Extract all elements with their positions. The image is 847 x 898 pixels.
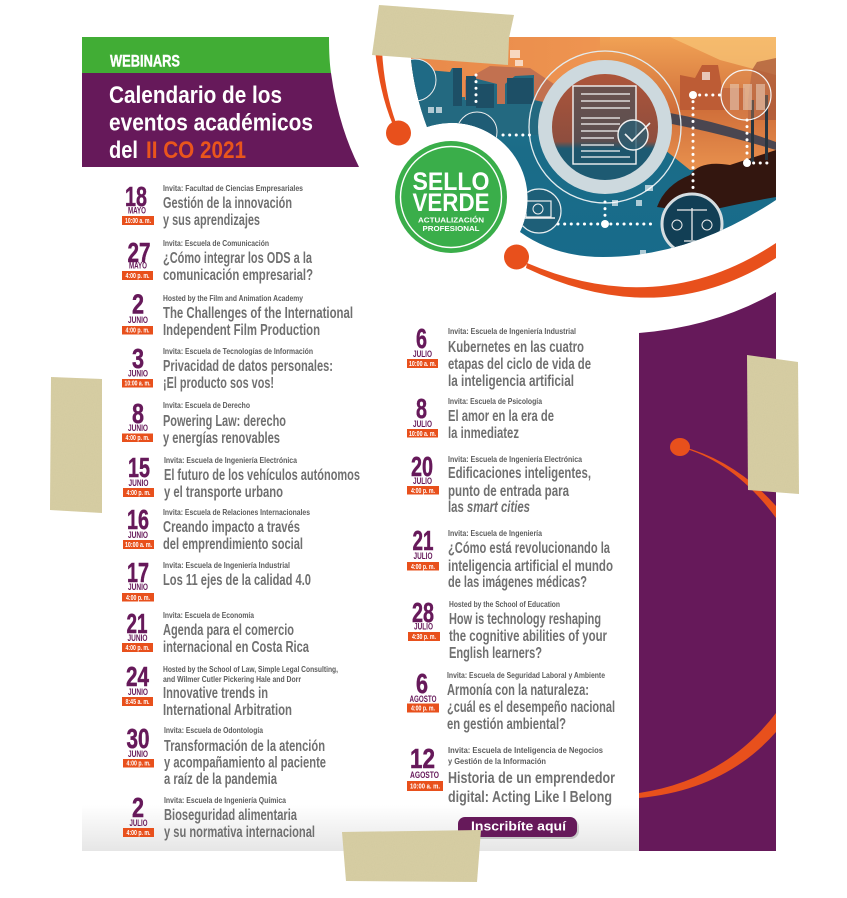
event: 8 junio: y energías renovables	[163, 430, 280, 447]
icon: partial circle top left	[411, 58, 436, 102]
event: 27 mayo: 4:00 p. m.	[126, 273, 150, 280]
event: 18 mayo: 10:00 a. m.	[125, 218, 151, 225]
event: 8 junio: Invita: Escuela de Derecho	[163, 401, 250, 410]
event: 12 agosto: y Gestión de la Información	[448, 757, 546, 766]
dotted connector lines	[476, 75, 772, 224]
event: 15 junio: Invita: Escuela de Ingeniería Electrónica	[164, 456, 298, 465]
event: 16 junio: del emprendimiento social	[163, 536, 303, 553]
icon: document with check ring	[529, 51, 681, 203]
event: 2 junio: JUNIO	[128, 315, 148, 325]
event: 8 junio: 4:00 p. m.	[126, 435, 150, 442]
event: 21 julio: inteligencia artificial el mundo	[448, 558, 613, 575]
event: 27 mayo: ¿Cómo integrar los ODS a la	[163, 250, 312, 267]
event: 6 agosto: 4:00 p. m.	[411, 706, 435, 712]
event: 30 junio: 4:00 p. m.	[126, 760, 151, 768]
header: main title	[82, 73, 359, 167]
event: 20 julio: Invita: Escuela de Ingeniería Electrónica	[448, 455, 583, 464]
event: 15 junio: JUNIO	[128, 478, 148, 488]
event: 28 julio: English learners?	[449, 645, 542, 662]
tape: left	[50, 377, 102, 513]
event: 30 junio: Transformación de la atención	[164, 738, 325, 755]
event: 6 agosto: 6	[416, 668, 428, 699]
event: 2 junio: The Challenges of the International	[163, 305, 353, 322]
event: 18 mayo: MAYO	[128, 206, 146, 216]
event: 27 mayo: comunicación empresarial?	[163, 267, 313, 284]
header: main title: eventos académicos	[109, 110, 313, 136]
icon: laptop circle	[517, 189, 561, 233]
event: 30 junio	[123, 723, 326, 788]
event: 30 junio: 30	[126, 723, 150, 754]
event: 27 mayo: Invita: Escuela de Comunicación	[163, 239, 269, 248]
event: 15 junio: 15	[128, 452, 150, 483]
event: 2 julio: JULIO	[130, 818, 148, 828]
event: 18 mayo: 18	[125, 181, 147, 212]
event: 3 junio: 10:00 a. m.	[124, 380, 151, 388]
icon: binders circle	[721, 70, 771, 120]
event: 3 junio	[122, 343, 333, 392]
badge: Sello Verde: SELLO	[412, 168, 490, 196]
event: 17 junio: 4:00 p. m.	[126, 595, 150, 602]
event: 24 junio: JUNIO	[128, 687, 148, 697]
event: 21 junio: 4:00 p. m.	[126, 645, 150, 652]
event: 30 junio: Invita: Escuela de Odontología	[164, 726, 264, 735]
event: 6 agosto: ¿cuál es el desempeño nacional	[447, 699, 615, 716]
event: 2 julio: Invita: Escuela de Ingeniería Química	[164, 796, 287, 805]
event: 8 julio: 10:00 a. m.	[409, 431, 436, 438]
event: 16 junio: 10:00 a. m.	[125, 542, 152, 549]
event: 3 junio: Privacidad de datos personales:	[163, 358, 333, 375]
event: 21 julio: de las imágenes médicas?	[448, 574, 587, 591]
event: 6 agosto	[407, 668, 615, 733]
event: 21 julio: 21	[412, 525, 434, 556]
event: 6 julio: JULIO	[413, 349, 432, 359]
event: 21 julio: 4:00 p. m.	[411, 564, 435, 571]
event: 20 julio	[407, 451, 591, 516]
event: 6 julio: etapas del ciclo de vida de	[448, 356, 591, 373]
event: 24 junio	[122, 661, 338, 719]
tape: top	[372, 5, 514, 65]
event: 24 junio: Hosted by the School of Law, Simple Legal Consulting,	[163, 665, 338, 674]
event: 16 junio: Invita: Escuela de Relaciones Internacionales	[163, 508, 311, 517]
event: 15 junio: 4:00 p. m.	[126, 490, 151, 497]
event: 28 julio: 4:30 p. m.	[412, 634, 436, 641]
icon: scales circle	[662, 194, 722, 254]
event: 6 julio	[407, 323, 591, 390]
event: 17 junio: Los 11 ejes de la calidad 4.0	[163, 572, 311, 589]
event: 16 junio: JUNIO	[128, 530, 148, 540]
event: 28 julio: JULIO	[414, 622, 433, 632]
event: 12 agosto	[407, 743, 615, 806]
event: 2 junio: Independent Film Production	[163, 322, 320, 339]
event: 3 junio: Invita: Escuela de Tecnologías de Información	[163, 347, 313, 356]
event: 15 junio: y el transporte urbano	[164, 484, 283, 501]
event: 6 agosto: Invita: Escuela de Seguridad Laboral y Ambiente	[447, 671, 606, 680]
event: 2 junio: Hosted by the Film and Animation Academy	[163, 294, 304, 303]
event: 2 julio: 2	[132, 792, 144, 823]
image: city and data illustration	[394, 37, 780, 262]
event: 24 junio: 8:45 a. m.	[126, 699, 150, 706]
event: 6 julio: Kubernetes en las cuatro	[448, 339, 584, 356]
event: 20 julio: JULIO	[413, 476, 432, 486]
event: 24 junio: 24	[126, 661, 149, 692]
event: 28 julio: How is technology reshaping	[449, 611, 601, 628]
event: 12 agosto: 10:00 a. m.	[410, 784, 440, 790]
event: 12 agosto: Historia de un emprendedor	[448, 770, 615, 787]
decorative arc: bottom orange curve with dot	[504, 243, 776, 298]
button: Inscribíte aquí: Inscribíte aquí	[471, 820, 567, 834]
event: 24 junio: and Wilmer Cutler Pickering Hale and Dorr	[163, 675, 301, 684]
event: 2 julio: 4:00 p. m.	[126, 830, 151, 837]
event: 17 junio: 17	[127, 557, 149, 588]
decorative arc: top left orange line with dot	[375, 50, 411, 146]
event: 24 junio: Innovative trends in	[163, 685, 268, 702]
event: 2 julio: y su normativa internacional	[164, 824, 315, 841]
event: 8 julio: Invita: Escuela de Psicología	[448, 397, 543, 406]
event: 16 junio: Creando impacto a través	[163, 519, 300, 536]
event: 17 junio	[122, 557, 311, 602]
header: green webinars strip	[82, 37, 331, 73]
event: 15 junio: El futuro de los vehículos autónomos	[164, 467, 360, 484]
badge: Sello Verde: VERDE	[412, 189, 490, 217]
badge: Sello Verde: ACTUALIZACIÓN	[418, 216, 484, 224]
event: 28 julio: 28	[412, 597, 434, 628]
panel: purple side band	[639, 292, 776, 851]
header: main title: Calendario de los	[109, 82, 282, 109]
decorative arc: upper orange line with dot	[670, 438, 776, 518]
event: 27 mayo: MAYO	[129, 260, 147, 270]
event: 12 agosto: digital: Acting Like I Belong	[448, 789, 612, 806]
event: 8 junio: Powering Law: derecho	[163, 413, 286, 430]
header: main title: II CO 2021	[146, 137, 246, 164]
event: 12 agosto: Invita: Escuela de Inteligencia de Negocios	[448, 746, 604, 755]
icon: partial circle laptop left	[458, 112, 498, 138]
event: 21 julio: JULIO	[414, 551, 432, 561]
event: 17 junio: Invita: Escuela de Ingeniería Industrial	[163, 561, 290, 570]
event: 6 agosto: en gestión ambiental?	[447, 716, 566, 733]
event: 6 julio: la inteligencia artificial	[448, 373, 574, 390]
event: 20 julio: las smart cities	[448, 499, 530, 516]
event: 2 julio: Bioseguridad alimentaria	[164, 807, 297, 824]
event: 30 junio: a raíz de la pandemia	[164, 771, 277, 788]
event: 3 junio: 3	[132, 343, 144, 374]
tape: bottom	[342, 830, 481, 882]
event: 16 junio: 16	[127, 504, 149, 535]
event: 20 julio: 4:00 p. m.	[411, 488, 435, 495]
event: 6 julio: 6	[416, 323, 427, 354]
header: main title: del	[109, 137, 138, 164]
header: green webinars strip: WEBINARS	[110, 52, 180, 70]
button: Inscribíte aquí	[458, 817, 579, 839]
event: 6 julio: 10:00 a. m.	[409, 361, 436, 368]
event: 20 julio: Edificaciones inteligentes,	[448, 465, 591, 482]
event: 8 julio: la inmediatez	[448, 425, 519, 442]
event: 8 junio: JUNIO	[128, 423, 148, 433]
event: 20 julio: 20	[411, 451, 433, 482]
event: 21 julio: Invita: Escuela de Ingeniería	[448, 529, 543, 538]
event: 8 julio: 8	[416, 393, 427, 424]
event: 21 junio: Invita: Escuela de Economía	[163, 611, 255, 620]
event: 21 junio: internacional en Costa Rica	[163, 639, 309, 656]
badge: Sello Verde: PROFESIONAL	[422, 224, 480, 233]
event: 18 mayo: Gestión de la innovación	[163, 195, 292, 212]
event: 18 mayo: y sus aprendizajes	[163, 212, 260, 229]
event: 6 agosto: Armonía con la naturaleza:	[447, 682, 589, 699]
event: 2 julio	[123, 792, 315, 841]
event: 20 julio: punto de entrada para	[448, 483, 569, 500]
event: 8 junio: 8	[132, 398, 144, 429]
tape: right	[747, 355, 799, 494]
event: 27 mayo: 27	[128, 237, 150, 268]
event: 8 julio: El amor en la era de	[448, 408, 554, 425]
event: 21 junio: Agenda para el comercio	[163, 622, 294, 639]
event: 3 junio: JUNIO	[128, 368, 148, 378]
event: 21 junio: 21	[126, 608, 148, 639]
event: 3 junio: ¡El producto sos vos!	[163, 375, 274, 392]
event: 2 junio	[122, 288, 353, 339]
event: 18 mayo: Invita: Facultad de Ciencias Empresariales	[163, 184, 304, 193]
event: 18 mayo	[122, 181, 304, 229]
event: 16 junio	[123, 504, 311, 553]
event: 24 junio: International Arbitration	[163, 702, 292, 719]
event: 30 junio: JUNIO	[128, 749, 148, 759]
decorative arc: lower orange band	[639, 713, 776, 798]
event: 6 julio: Invita: Escuela de Ingeniería Industrial	[448, 327, 576, 336]
event: 2 junio: 2	[132, 288, 144, 320]
event: 28 julio: Hosted by the School of Education	[449, 600, 560, 609]
event: 12 agosto: 12	[410, 743, 435, 774]
event: 21 julio	[407, 525, 613, 591]
event: 15 junio	[123, 452, 360, 501]
event: 8 julio	[407, 393, 554, 442]
event: 21 julio: ¿Cómo está revolucionando la	[448, 540, 610, 557]
event: 27 mayo	[122, 237, 313, 284]
event: 17 junio: JUNIO	[128, 582, 148, 592]
event: 21 junio	[122, 608, 309, 656]
badge: Sello Verde	[395, 141, 507, 253]
event: 21 junio: JUNIO	[128, 633, 148, 643]
event: 12 agosto: AGOSTO	[410, 770, 439, 780]
event: 6 agosto: AGOSTO	[410, 694, 436, 704]
event: 8 julio: JULIO	[413, 419, 432, 429]
panel: paper background	[82, 37, 639, 851]
event: 2 junio: 4:00 p. m.	[126, 328, 150, 334]
event: 28 julio: the cognitive abilities of your	[449, 628, 607, 645]
event: 28 julio	[408, 597, 607, 662]
event: 8 junio	[122, 398, 286, 447]
event: 30 junio: y acompañamiento al paciente	[164, 754, 326, 772]
